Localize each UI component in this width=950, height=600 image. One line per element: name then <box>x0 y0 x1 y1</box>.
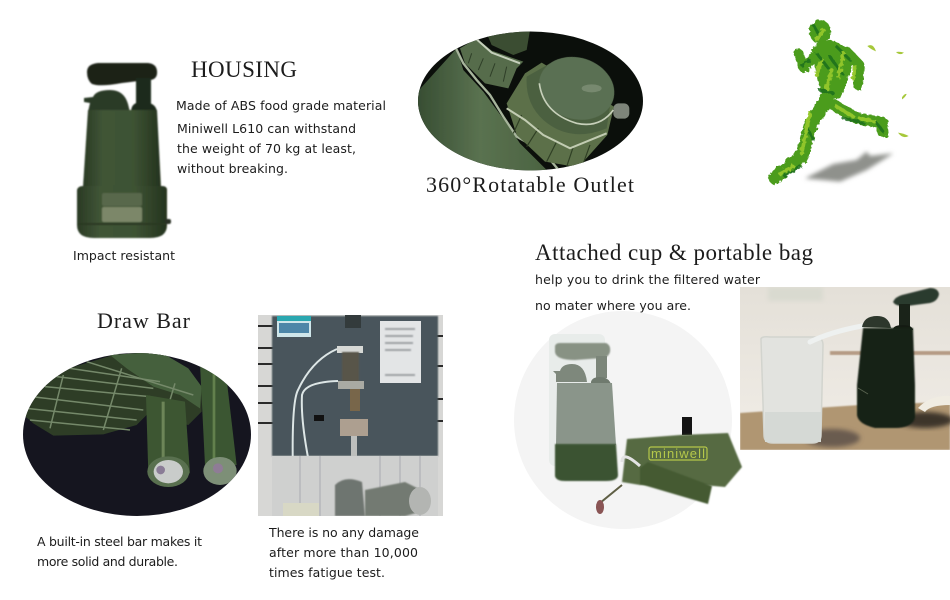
image: pump with cup and portable bag: miniwell <box>651 446 705 461</box>
text: steel bar caption <box>37 534 202 569</box>
text block: housing description: Miniwell L610 can withstand <box>177 121 356 136</box>
image: pump with cup and portable bag <box>514 311 742 529</box>
runner shadow <box>805 152 893 182</box>
caption: impact resistant: Impact resistant <box>73 248 175 263</box>
text: cup and bag description: no mater where you are. <box>535 298 691 313</box>
heading: draw bar: Draw Bar <box>97 308 191 333</box>
text: fatigue test caption: after more than 10,000 <box>269 545 418 560</box>
photo: fatigue test machine <box>258 315 443 517</box>
text: steel bar caption: A built-in steel bar makes it <box>37 534 202 549</box>
image: green pump housing <box>77 63 171 238</box>
image: running figure made of leaves <box>775 20 909 182</box>
image: draw bar cross section <box>20 350 254 518</box>
photo: pump filling a glass by the water <box>740 287 950 450</box>
text: steel bar caption: more solid and durable. <box>37 554 178 569</box>
text: cup and bag description <box>535 272 761 313</box>
text block: housing description: without breaking. <box>177 161 288 176</box>
flying leaves <box>867 45 909 137</box>
text: fatigue test caption: There is no any damage <box>268 525 419 540</box>
caption: rotatable outlet: 360°Rotatable Outlet <box>426 172 634 197</box>
heading: attached cup and bag: Attached cup & portable bag <box>535 240 814 265</box>
image: rotatable outlet <box>410 30 644 173</box>
heading: housing: HOUSING <box>191 57 297 82</box>
text block: housing description: the weight of 70 kg at least, <box>177 141 356 156</box>
text block: housing description: Made of ABS food grade material <box>176 98 386 113</box>
text: fatigue test caption <box>268 525 419 580</box>
text: cup and bag description: help you to drink the filtered water <box>535 272 761 287</box>
text: fatigue test caption: times fatigue test. <box>269 565 385 580</box>
text block: housing description <box>176 98 386 176</box>
